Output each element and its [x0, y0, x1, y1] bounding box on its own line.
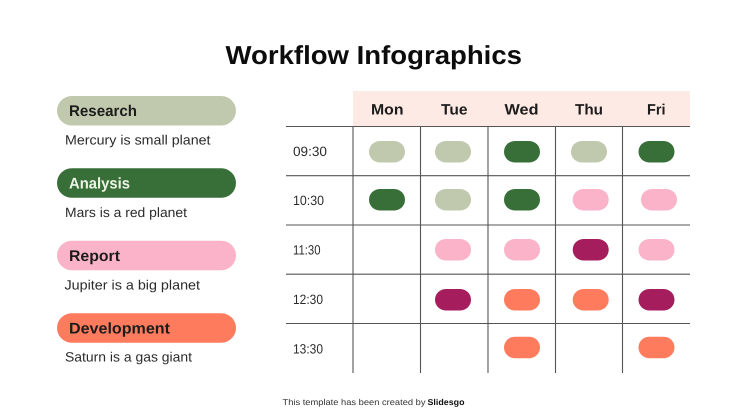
time labels: 11:30: [293, 242, 320, 258]
time labels: 12:30: [293, 292, 323, 307]
time labels: [293, 144, 327, 356]
legend item: Analysis: Analysis: [69, 176, 130, 192]
footer credit: Slidesgo: [428, 397, 464, 407]
legend item: Research: [57, 96, 236, 148]
weekday labels: Tue: [441, 101, 468, 118]
weekday labels: Wed: [504, 101, 538, 118]
weekday labels: [371, 101, 666, 118]
legend item: Report: Report: [69, 248, 120, 265]
row 11:30 pills: [435, 239, 674, 260]
legend item: Report: [57, 241, 236, 292]
time labels: 13:30: [293, 341, 323, 356]
row 10:30 pills: [369, 189, 677, 210]
legend item: Research: Research: [69, 103, 137, 120]
weekday labels: Fri: [647, 101, 666, 118]
legend item: Development: Saturn is a gas giant: [65, 350, 192, 364]
title: Workflow Infographics: [226, 40, 522, 70]
row 12:30 pills: [435, 289, 674, 310]
legend item: Report: Jupiter is a big planet: [64, 277, 200, 292]
panel: legend: [57, 96, 236, 364]
legend item: Analysis: [57, 168, 236, 220]
legend item: Research: Mercury is small planet: [65, 132, 211, 148]
time labels: 10:30: [293, 193, 324, 208]
legend item: Analysis: Mars is a red planet: [65, 205, 187, 220]
weekday labels: Mon: [371, 101, 404, 118]
legend item: Development: [57, 313, 236, 364]
table header band: [353, 91, 690, 126]
schedule table: [286, 91, 690, 373]
row 13:30 pills: [504, 337, 674, 358]
row 09:30 pills: [369, 141, 674, 162]
footer credit: This template has been created by: [282, 397, 426, 407]
time labels: 09:30: [293, 144, 327, 159]
weekday labels: Thu: [575, 101, 603, 118]
legend item: Development: Development: [69, 320, 170, 337]
table grid: [286, 126, 690, 373]
